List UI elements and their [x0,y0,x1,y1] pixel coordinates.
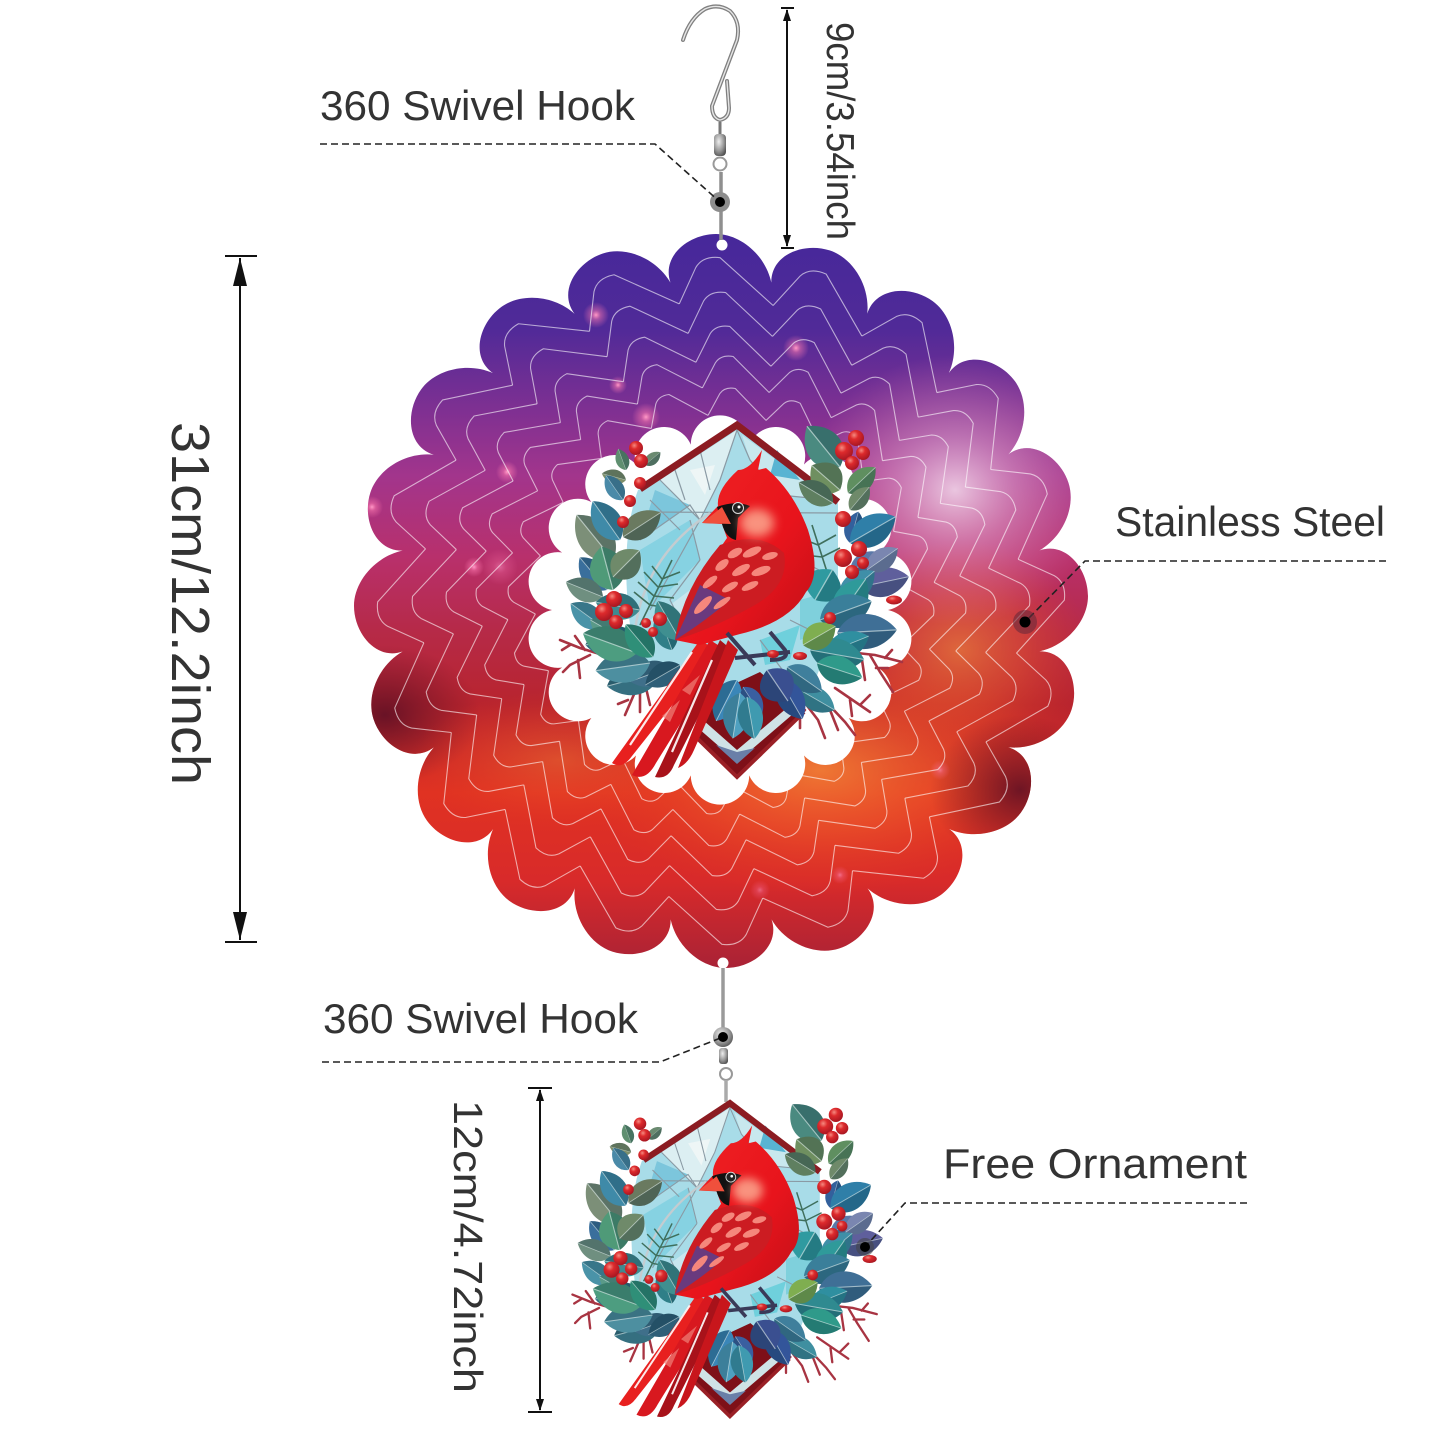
red sprigs [560,636,902,738]
face and beak [702,502,774,540]
legs on branch [727,632,790,665]
label: top 360 swivel hook: 360 Swivel Hook [320,82,636,129]
holly leaves [562,415,912,741]
S hook [683,6,738,120]
tail [612,640,738,778]
label: free ornament [856,1140,1247,1256]
bead [710,192,730,212]
top hanging hole [716,240,728,250]
label: free ornament: Free Ornament [943,1140,1247,1187]
bottom hanging hole [718,958,728,968]
dark red frame [640,425,838,502]
dimension: hook length 9cm: 9cm/3.54inch [818,22,861,240]
label: bottom 360 swivel hook: 360 Swivel Hook [323,995,639,1042]
white scalloped centre [529,415,911,805]
swivel barrel and ring [714,122,726,240]
dimension: spinner diameter 31cm: 31cm/12.2inch [160,422,220,785]
dimension: hook length 9cm [781,8,861,248]
top swivel hook [683,6,738,240]
dimension: ornament height 12cm [445,1088,552,1412]
stained glass panel [626,424,838,777]
wing with pale feathers [675,539,785,640]
label: stainless steel [1013,498,1386,634]
spinner body with purple to red gradient, glows and zigzag lines [354,234,1088,968]
wind spinner disc [354,234,1088,968]
bottom swivel connector [713,968,733,1102]
free ornament [572,1094,886,1417]
red berries [595,430,902,660]
label: bottom 360 swivel hook [322,995,728,1062]
lower diamond [697,672,804,777]
cardinal artwork in spinner centre [560,415,912,778]
cardinal body [675,450,815,645]
label: top 360 swivel hook [320,82,725,207]
dimension: ornament height 12cm: 12cm/4.72inch [445,1100,491,1393]
pine sprig [634,525,840,625]
dimension: spinner diameter 31cm [160,256,257,942]
label: stainless steel: Stainless Steel [1115,498,1385,545]
